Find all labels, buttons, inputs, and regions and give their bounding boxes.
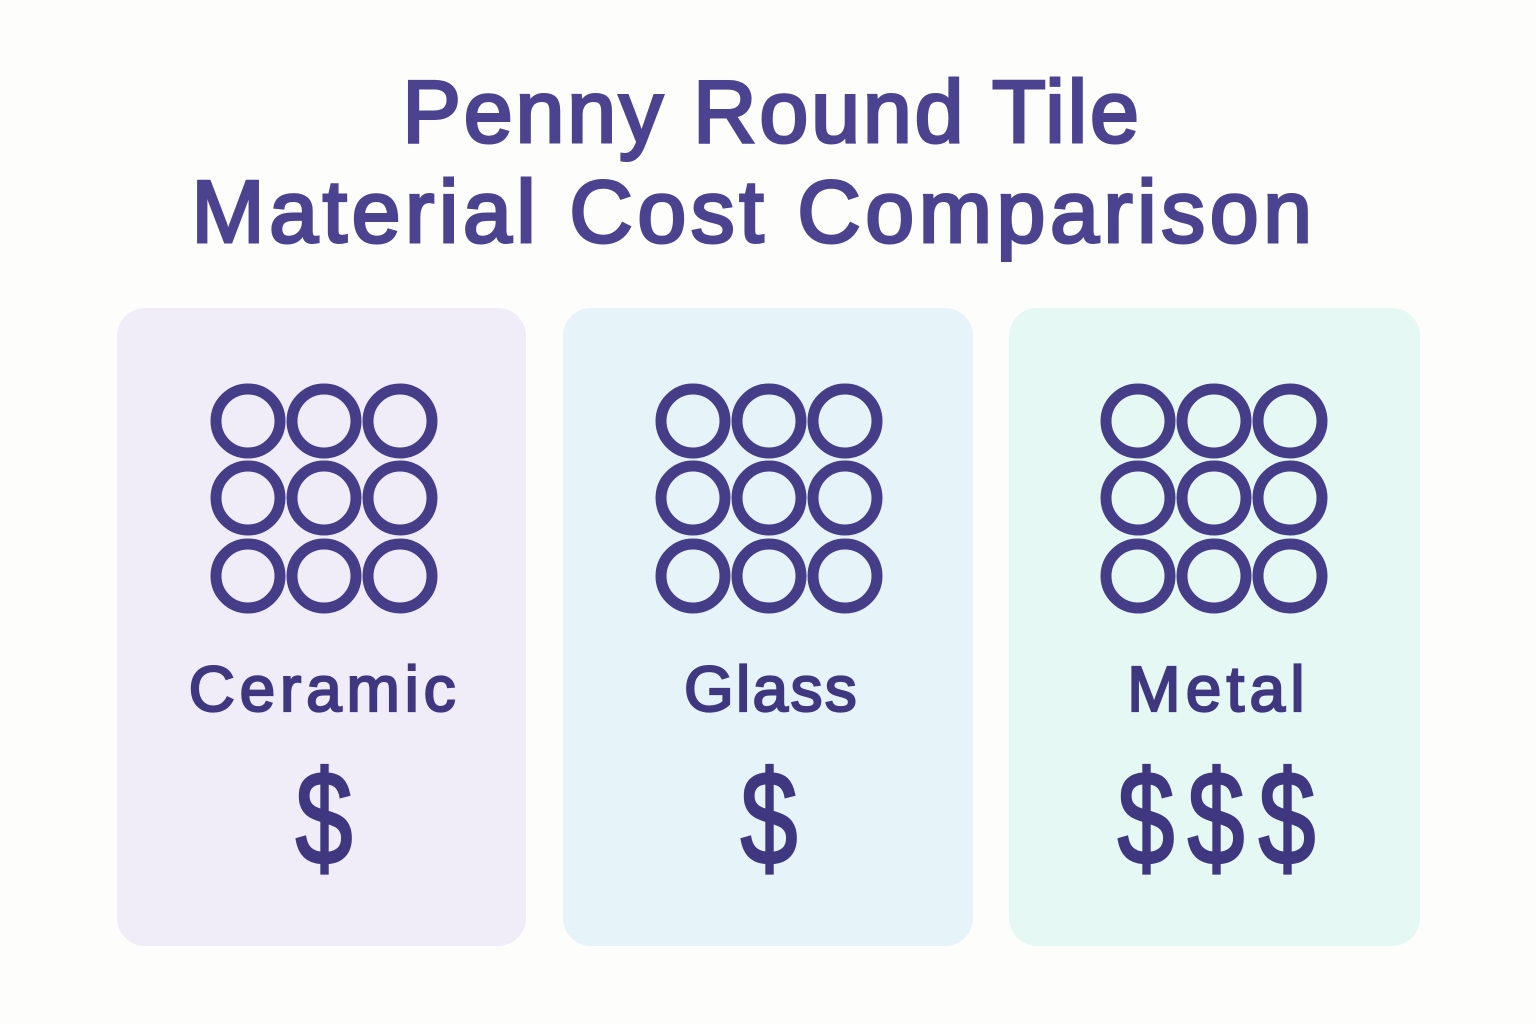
label: metal: Metal: [1127, 653, 1310, 725]
title: [191, 62, 1317, 262]
cost: metal: [1117, 743, 1315, 893]
title line 1: Penny Round Tile: [402, 62, 1142, 161]
label: ceramic: Ceramic: [189, 653, 460, 725]
icon: metal tile grid: [1100, 384, 1328, 614]
cost: metal: $: [1259, 743, 1315, 893]
panel: metal: [1009, 308, 1420, 946]
icon: ceramic tile grid: [210, 384, 438, 614]
cost: glass: $: [741, 743, 797, 893]
cost: metal: $: [1188, 743, 1244, 893]
panel: ceramic: [117, 308, 526, 946]
cost: ceramic: $: [296, 743, 352, 893]
icon: glass tile grid: [656, 384, 882, 614]
label: glass: Glass: [684, 653, 859, 725]
cost: metal: $: [1118, 743, 1174, 893]
title line 2: Material Cost Comparison: [191, 162, 1317, 261]
panel: glass: [563, 308, 973, 946]
